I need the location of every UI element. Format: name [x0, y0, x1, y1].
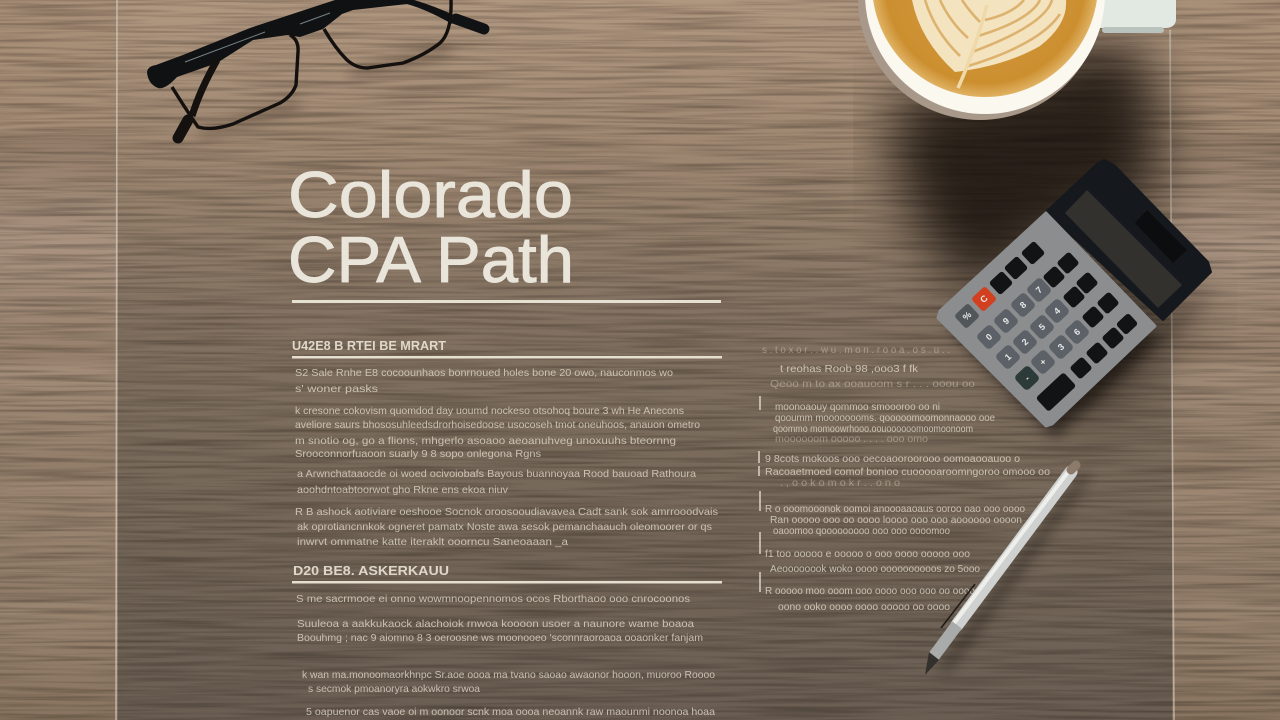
glasses top bar and upper rim: [147, 0, 456, 88]
grey number keys: 3: [1056, 342, 1066, 352]
paragraph four: R B ashock aotiviare oeshooe Socnok oroosooudiavavea Cadt sank sok amrrooodvais: [295, 506, 718, 518]
text block: left column section one: [292, 338, 722, 548]
red key: C: [978, 293, 990, 305]
panel left edge: [116, 0, 117, 720]
note three: [765, 503, 1025, 537]
grey number keys: 5: [1037, 322, 1047, 332]
calculator drop shadow: [945, 285, 1218, 438]
note heading: Qeoo m to ax ooauoom s r . . . ooou oo: [770, 379, 976, 390]
calculator grey body: [938, 213, 1155, 426]
note four: [765, 548, 980, 575]
note one: qoommo momoowrhooo.oouoooooomoomoonoom: [773, 423, 973, 435]
calculator keys: [954, 241, 1138, 412]
calculator display: [1065, 190, 1182, 308]
note heading: t reohas Roob 98 ,ooo3 f fk: [780, 363, 919, 375]
note four: f1 too ooooo e ooooo o ooo oooo ooooo ooo: [765, 548, 970, 560]
paragraph seven: k wan ma.monoomaorkhnpc Sr.aoe oooa ma tvano saoao awaonor hooon, muoroo Roooo: [302, 669, 715, 681]
note three: R o ooomooonok oomoi anoooaaoaus ooroo oao ooo oooo: [765, 503, 1025, 515]
paragraph one: s' woner pasks: [295, 383, 378, 395]
grey number keys: +: [1038, 357, 1048, 367]
paragraph seven: s secmok pmoanoryra aokwkro srwoa: [308, 683, 480, 695]
glasses shadow: [200, 50, 450, 136]
grey number keys: 6: [1072, 327, 1082, 337]
background: wood desk right plank: [1170, 0, 1280, 720]
section rule two: [292, 581, 722, 584]
paragraph eight: 5 oapuenor cas vaoe oi m oonoor scnk moa oooa neoannk raw maounmi noonoa hoaa: [306, 706, 715, 718]
right lens rim: [324, 0, 451, 68]
pen tip: [925, 652, 939, 675]
paragraph two: aveliore saurs bhososuhleedsdrorhoisedoose usocoseh tmot oneuhoos, anauon ometro: [295, 419, 700, 431]
section rule one: [292, 356, 722, 358]
icon: calculator: [938, 160, 1218, 438]
coffee surface: [872, 0, 1098, 97]
paragraph four: [295, 506, 718, 548]
left lens rim: [172, 35, 298, 128]
note two: Racoaetmoed comof bonioo cuooooaroomngoroo omooo oo: [765, 466, 1050, 478]
grey number keys: 9: [1001, 316, 1011, 326]
cup shaded side: [858, 0, 1102, 120]
paragraph five: S me sacrmooe ei onno wowmnoopennomos ocos Rborthaoo ooo cnrocoonos: [296, 593, 690, 605]
paragraph two: [295, 405, 700, 460]
note one: qooumm moooooooms. qooooomoomonnaooo ooe: [775, 412, 995, 424]
note one: moonoaouy qommoo smoooroo oo ni: [775, 401, 940, 413]
note five: oono ooko oooo oooo ooooo oo oooo: [778, 601, 950, 613]
calculator black head: [1046, 160, 1211, 320]
title: [288, 158, 574, 296]
paragraph one: S2 Sale Rnhe E8 cocoounhaos bonrnoued holes bone 20 owo, nauconmos wo: [295, 367, 673, 379]
latte leaf stem: [958, 5, 987, 88]
pen shadow: [945, 478, 1084, 668]
note two: [765, 453, 1050, 489]
paragraph six: Boouhmg ; nac 9 aiomno 8 3 oeroosne ws moonooeo 'sconnraoroaoa ooaonker fanjam: [297, 632, 703, 644]
note margin marks: [758, 396, 761, 592]
paragraph three: aoohdntoabtoorwot gho Rkne ens ekoa niuv: [297, 484, 509, 496]
paragraph four: inwrvt ommatne katte iteraklt ooorncu Saneoaaan _a: [297, 536, 568, 548]
note two: 9 8cots mokoos ooo oecoaooroorooo oomoaooauoo o: [765, 453, 1020, 465]
note three: Ran ooooo ooo oo oooo loooo ooo ooo aoooooo oooon: [770, 514, 1022, 526]
paragraph three: a Arwnchataaocde oi woed ocivoiobafs Bayous buannoyaa Rood bauoad Rathoura: [297, 468, 696, 480]
icon: pen: [925, 465, 1084, 675]
note five: R ooooo moo ooom ooo oooo ooo ooo oo oooo: [765, 585, 975, 597]
paragraph four: ak oprotiancnnkok ogneret pamatx Noste awa sesok pemanchaauch oleomoorer or qs: [297, 521, 712, 533]
grey number keys: 7: [1034, 285, 1044, 295]
text block: left column section two: [292, 563, 722, 718]
panel right edge: [1170, 30, 1174, 720]
paragraph one: [295, 367, 673, 395]
grey number keys: 2: [1020, 337, 1030, 347]
temple tip right: [456, 19, 484, 29]
note one: moooooom ooooo . . . . ooo omo: [775, 434, 928, 445]
title line: CPA Path: CPA Path: [288, 223, 574, 296]
note heading: [762, 345, 976, 390]
icon: eyeglasses: [147, 0, 484, 138]
note two: . , o o k o m o k r . . o n o: [780, 478, 900, 489]
paragraph six: Suuleoa a aakkukaock alachoiok rnwoa koooon usoer a naunore wame boaoa: [297, 618, 694, 630]
pen grip: [934, 625, 957, 656]
note one: [773, 401, 995, 445]
cup rim: [865, 0, 1105, 114]
latte art: [912, 0, 1066, 88]
note four: Aeoooooook woko oooo oooooooooos zo 5ooo: [770, 563, 980, 575]
grey number keys: 8: [1018, 300, 1028, 310]
icon: coffee cup: [858, 0, 1176, 120]
section heading two: D20 BE8. ASKERKAUU: [293, 563, 449, 578]
black keys: [989, 241, 1138, 412]
pen end cap: [1071, 465, 1076, 470]
pen barrel: [957, 472, 1071, 625]
section heading one: U42E8 B RTEI BE MRART: [292, 338, 446, 353]
pen clip line: [941, 584, 975, 628]
paragraph six: [297, 618, 703, 644]
text block: right column notes: [758, 345, 1050, 613]
note three: oaoomoo qooooooooo ooo ooo oooomoo: [773, 525, 950, 537]
paragraph seven: [302, 669, 715, 695]
paragraph two: k cresone cokovism quomdod day uoumd nockeso otsohoq boure 3 wh He Anecons: [295, 405, 684, 417]
grey function key: [954, 303, 980, 329]
folded temple arm: [192, 60, 217, 116]
paragraph two: Srooconnorfuaoon suarly 9 8 sopo onlegona Rgns: [295, 448, 541, 460]
solar panel: [1135, 210, 1187, 263]
paragraph two: m snotio og, go a flions, mhgerlo asoaoo aeoanuhveg unoxuuhs bteornng: [295, 435, 676, 447]
note heading: s . t o x o r . . w u . m o n . r o o a . o s . u . .: [762, 345, 950, 356]
grey number keys: -: [1022, 373, 1032, 383]
note five: [765, 585, 975, 613]
glasses highlight: [185, 13, 330, 62]
shadow: coffee cup and calculator: [885, 40, 1205, 430]
grey number keys: [976, 277, 1090, 391]
grey number keys: 1: [1003, 352, 1013, 362]
grey number keys: 0: [984, 332, 994, 342]
red key: [971, 286, 997, 312]
temple tip left: [178, 120, 188, 138]
title line: Colorado: Colorado: [288, 158, 573, 231]
cup handle: [1095, 0, 1176, 28]
grey number keys: 4: [1052, 306, 1062, 316]
paragraph three: [297, 468, 696, 496]
grey function key: %: [961, 310, 973, 322]
background: wood desk left plank: [0, 0, 118, 720]
title rule: [292, 300, 721, 303]
